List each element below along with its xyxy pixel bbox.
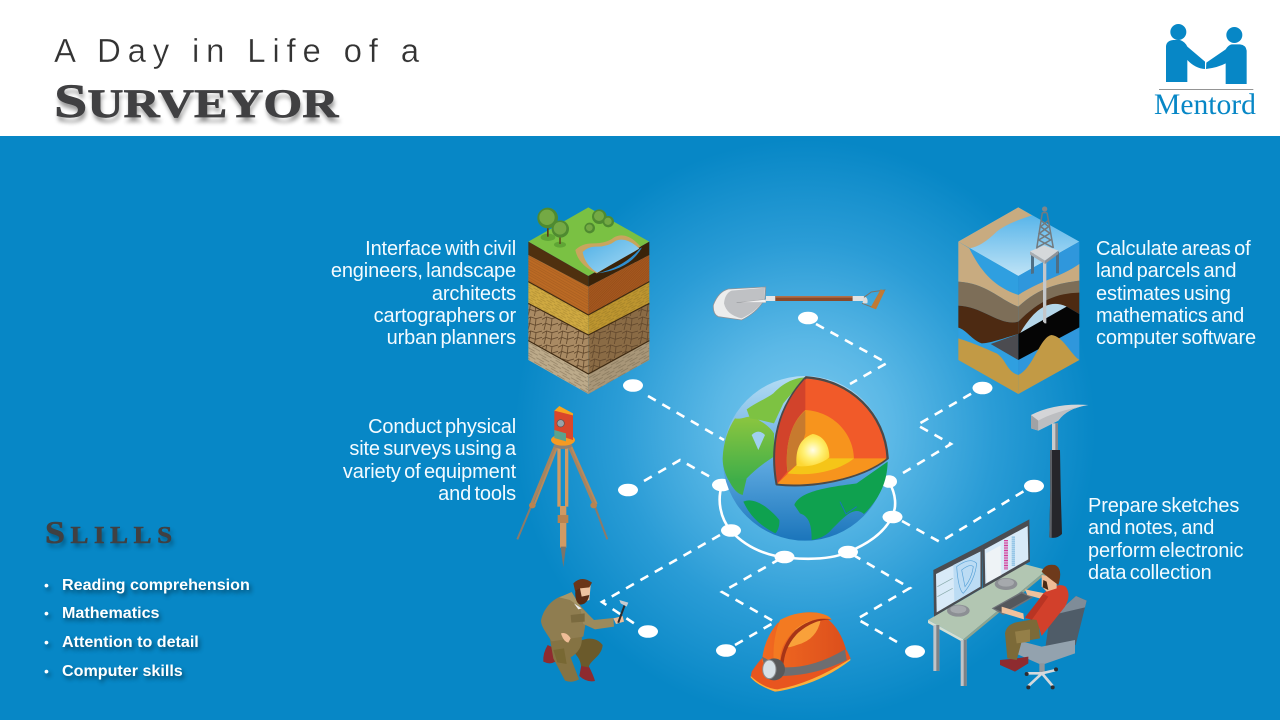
text: conduct site surveys: Conduct physical [368,416,516,438]
text: calculate areas: land parcels and [1096,260,1236,282]
skills list: • [44,577,49,593]
skills list: Attention to detail [62,633,199,651]
icon: orange miner helmet [751,612,851,692]
icon: geologist kneeling with hammer [541,579,628,682]
connector nodes [618,312,1044,658]
title line: A Day in Life of a: A Day in Life of a [54,32,426,69]
text: prepare sketches: Prepare sketches [1088,495,1239,517]
text: prepare sketches [1088,495,1243,584]
icon: shovel [713,287,885,320]
skills list: • [44,605,49,621]
logo icon: two people shaking hands [1159,24,1253,90]
icon: engineer at computer desk [928,519,1087,689]
text: interface with engineers: engineers, landscape [331,260,516,282]
icon: soil layers block [528,207,649,394]
dashed connector lines [602,324,1024,645]
text: calculate areas: Calculate areas of [1096,238,1251,260]
title line: Surveyor: SURVEYOR [54,75,338,128]
text: interface with engineers [331,238,516,349]
skills list: • [44,663,49,679]
text: conduct site surveys: and tools [438,483,516,505]
icon: rock hammer [1031,405,1088,538]
text: calculate areas: computer software [1096,327,1256,349]
text: interface with engineers: architects [432,283,516,305]
ring arc under globe [720,482,895,559]
skills heading: SLILLS [45,514,178,550]
text: conduct site surveys: site surveys using a [349,438,516,460]
text: prepare sketches: data collection [1088,562,1212,584]
icon: theodolite on tripod [517,406,607,567]
skills list [44,576,254,684]
text: calculate areas: mathematics and [1096,305,1244,327]
text: conduct site surveys: variety of equipment [343,461,516,483]
skills list: • [44,634,49,650]
skills list: Reading comprehension [62,576,250,594]
glow behind globe [430,136,1190,720]
text: interface with engineers: cartographers or [374,305,516,327]
skills list: Mathematics [62,604,160,622]
text: prepare sketches: and notes, and [1088,517,1214,539]
skills list: Computer skills [62,662,183,680]
text: interface with engineers: urban planners [387,327,516,349]
logo wordmark: Mentord [1154,89,1256,121]
text: calculate areas: estimates using [1096,283,1231,305]
text: calculate areas [1096,238,1256,349]
text: interface with engineers: Interface with civil [365,238,516,260]
text: prepare sketches: perform electronic [1088,540,1243,562]
icon: earth with core cutaway [723,376,888,541]
text: conduct site surveys [343,416,516,505]
icon: oil rig strata block [958,206,1079,394]
white header band [0,0,1280,136]
